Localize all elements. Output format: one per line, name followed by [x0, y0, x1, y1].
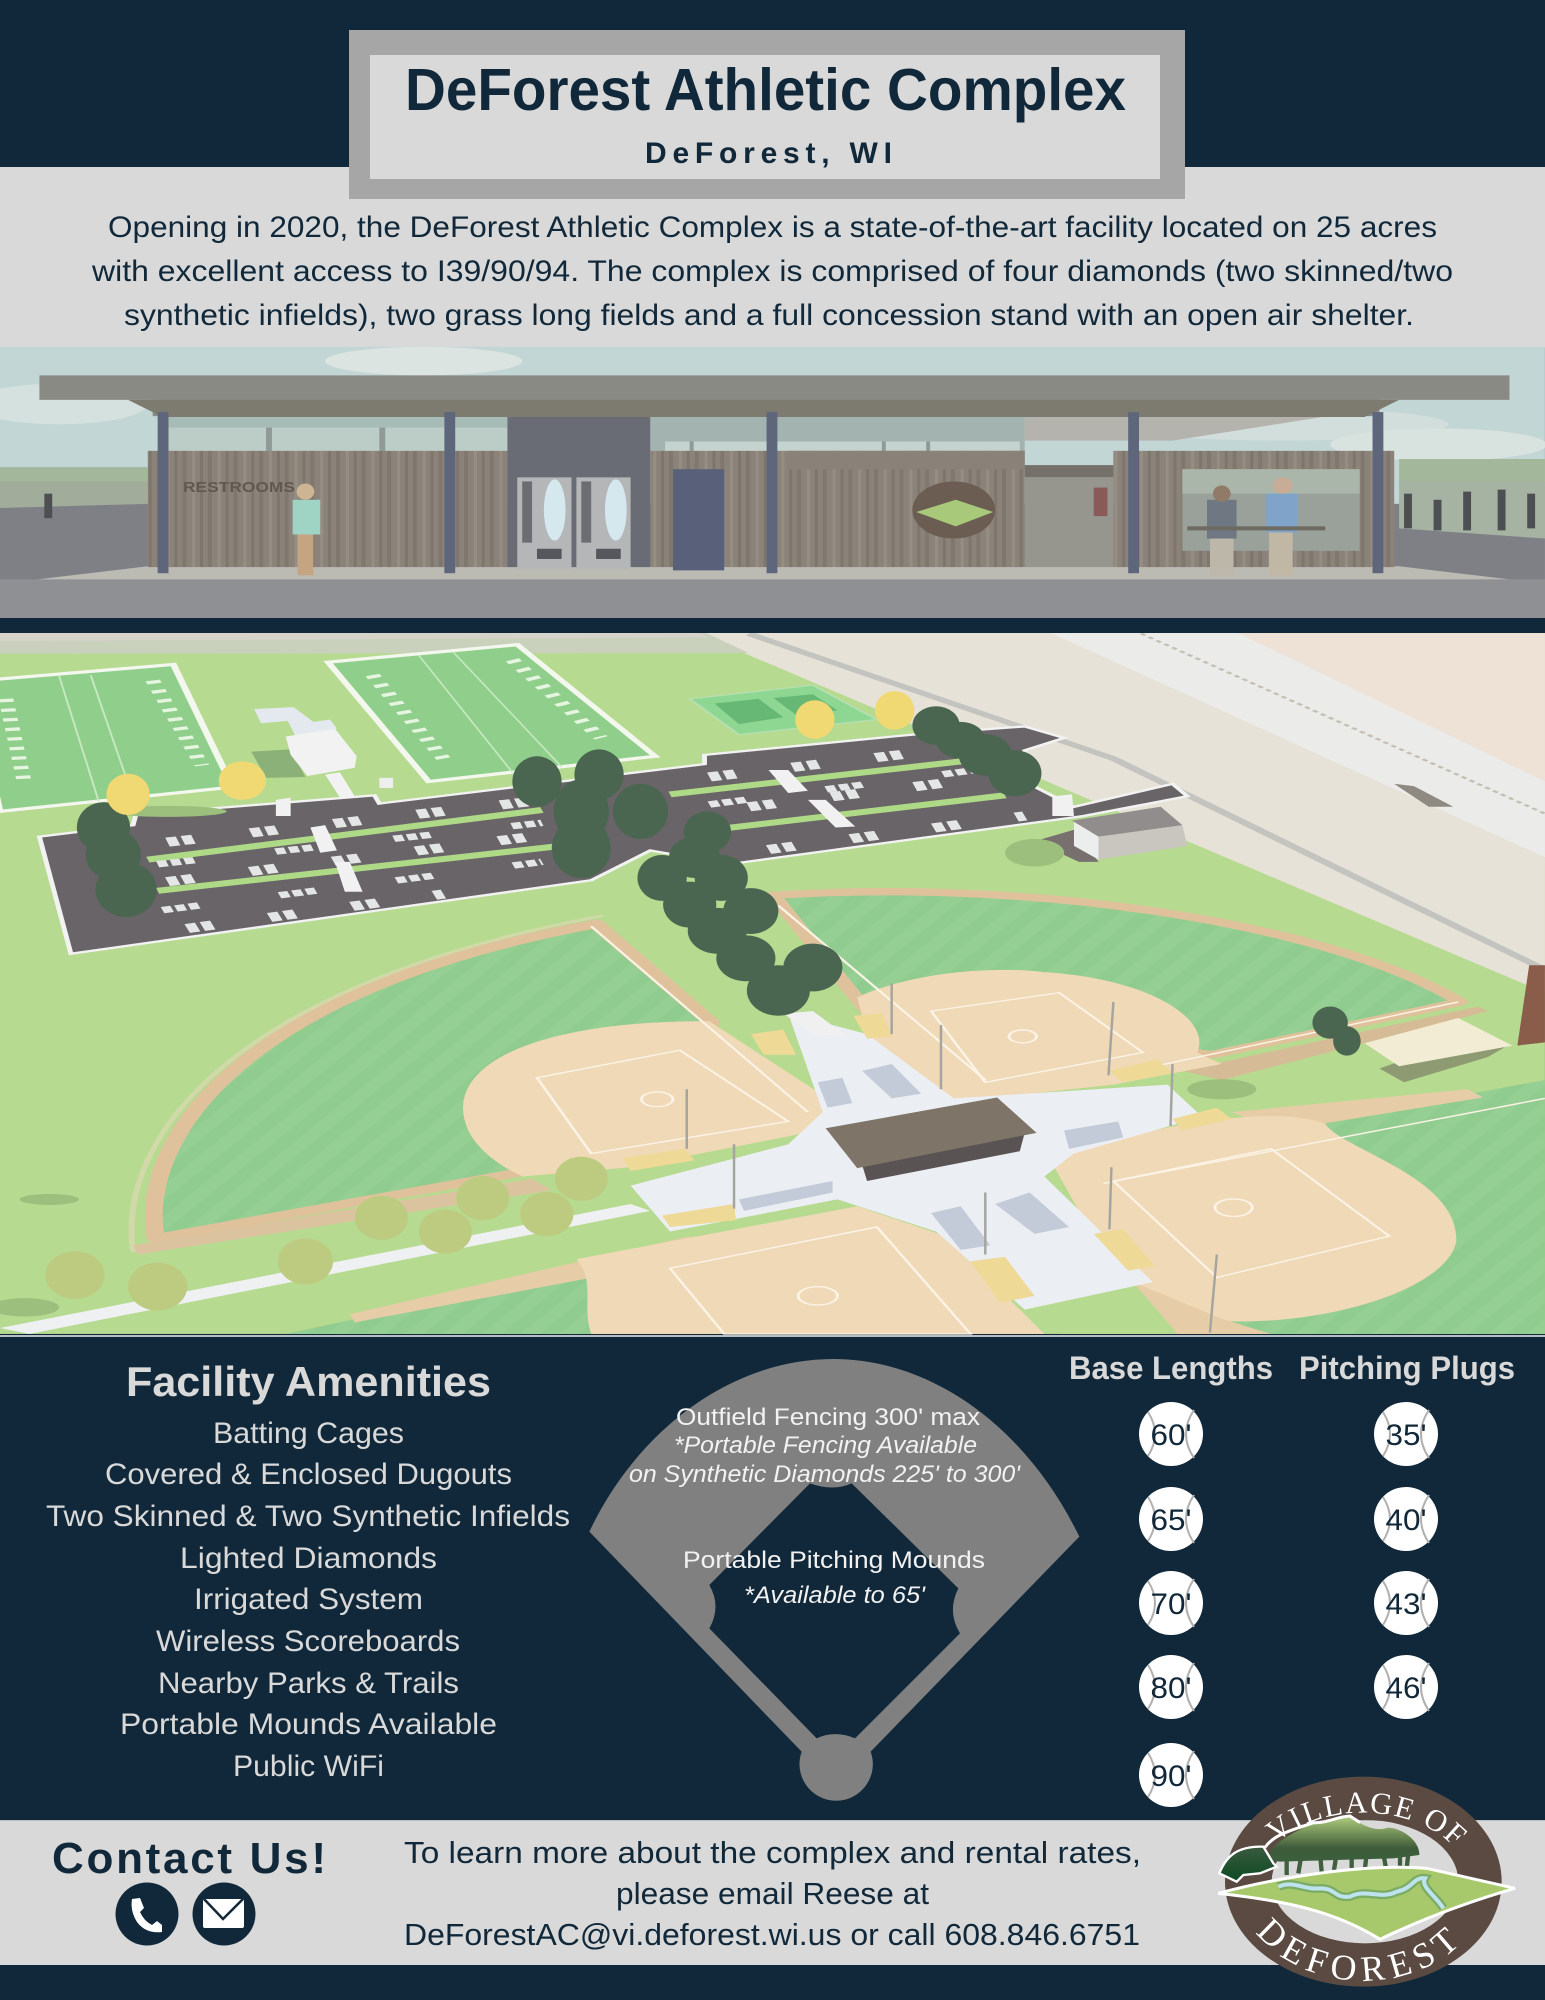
roof: [39, 375, 1509, 416]
logo tree line: [1219, 1816, 1419, 1882]
tree shadows: [0, 806, 1256, 1317]
pitching mounds note: Portable Pitching Mounds: [683, 1547, 985, 1574]
logo river: [1278, 1878, 1443, 1908]
frontage road: [749, 634, 1545, 970]
heading: facility amenities: Facility Amenities: [126, 1358, 491, 1405]
left diamond outfield: [154, 924, 711, 1238]
intro paragraph: Opening in 2020, the DeForest Athletic Complex is a state-of-the-art facility located on 25 acres: [108, 211, 1437, 244]
ground: [0, 504, 1545, 618]
icon: email: [192, 1882, 256, 1946]
central concession stand: [826, 1097, 1037, 1181]
outfield fencing note: [629, 1404, 1021, 1488]
warning paths: [350, 1236, 690, 1322]
olive trees: [45, 1157, 608, 1311]
intro paragraph: [91, 211, 1453, 332]
amenities list: Public WiFi: [233, 1750, 384, 1783]
upper glazing: [163, 416, 1025, 453]
people: [44, 477, 1535, 575]
outfield fencing note: on Synthetic Diamonds 225' to 300': [629, 1461, 1021, 1488]
pitching plug baseballs: 35': [1386, 1419, 1426, 1452]
title: DeForest Athletic Complex: [405, 57, 1126, 123]
bleachers: [739, 1064, 1123, 1250]
heading: pitching plugs: Pitching Plugs: [1299, 1350, 1515, 1386]
platform: [37, 566, 1509, 579]
light poles: [687, 984, 1217, 1333]
contact band: [0, 1821, 1545, 1965]
walls: [148, 451, 507, 567]
title box: [349, 30, 1185, 199]
outfield fencing note: Outfield Fencing 300' max: [676, 1404, 980, 1431]
contact text: To learn more about the complex and rental rates,: [404, 1835, 1141, 1870]
amenities list: [46, 1417, 570, 1783]
contact text: [404, 1835, 1141, 1952]
amenities list: Batting Cages: [213, 1417, 404, 1450]
intro paragraph: with excellent access to I39/90/94. The complex is comprised of four diamonds (two skinned/two: [91, 255, 1453, 288]
lower grass strip and dirt: [1025, 1282, 1177, 1334]
amenities list: Wireless Scoreboards: [156, 1625, 460, 1658]
base length baseballs: 70': [1150, 1588, 1192, 1621]
base length baseballs: 65': [1150, 1504, 1192, 1537]
logo: Village of DeForest: [1218, 1776, 1516, 1987]
parking islands: [276, 770, 1074, 892]
barn: [1035, 807, 1187, 862]
image: aerial site rendering: [0, 630, 1545, 1334]
football field 1: [0, 664, 233, 811]
image: concession building elevation: [0, 347, 1545, 618]
pitching plug baseballs: 40': [1386, 1504, 1426, 1537]
intro band: [0, 167, 1545, 348]
amenities list: Lighted Diamonds: [180, 1542, 437, 1575]
icon: phone: [116, 1882, 178, 1946]
parked cars: [168, 752, 1025, 928]
amenities list: Portable Mounds Available: [120, 1708, 497, 1741]
central plaza: [631, 1013, 1202, 1310]
outfield fencing note: *Portable Fencing Available: [674, 1432, 977, 1459]
building logo: [912, 481, 995, 539]
highway: [1044, 630, 1545, 857]
right diamond outfield: [773, 892, 1460, 1055]
base lines: [537, 906, 1545, 1334]
land beyond site: [690, 630, 1545, 993]
amenities list: Covered & Enclosed Dugouts: [105, 1458, 512, 1491]
yellow trees: [106, 691, 914, 815]
pitching plug baseballs: 43': [1386, 1588, 1426, 1621]
logo text top: VILLAGE OF: [1264, 1792, 1468, 1842]
tennis courts: [690, 685, 877, 735]
pitching mounds note: *Available to 65': [744, 1582, 926, 1609]
pavilion: [1365, 1018, 1512, 1082]
conifer trees: [77, 706, 1361, 1056]
amenities list: Nearby Parks & Trails: [158, 1667, 459, 1700]
navy separator above aerial: [0, 618, 1545, 633]
contact heading: Contact Us!: [52, 1834, 326, 1883]
baseball diamond graphic: [589, 1359, 1079, 1801]
base length baseballs: [1139, 1402, 1203, 1807]
subtitle: DeForest, WI: [645, 137, 892, 170]
base length baseballs: 90': [1150, 1760, 1192, 1793]
parking lot: [39, 726, 1187, 954]
base length baseballs: 80': [1150, 1672, 1192, 1705]
left diamond fence line: [132, 916, 603, 1252]
horizon trees: [0, 459, 1545, 483]
pitching plug baseballs: [1374, 1402, 1438, 1719]
dugouts: [623, 1013, 1232, 1303]
base length baseballs: 60': [1150, 1419, 1192, 1452]
intro paragraph: synthetic infields), two grass long fields and a full concession stand with an open air shelter.: [124, 299, 1414, 332]
lower right outfield: [1222, 1080, 1545, 1334]
logo green diamond: [1218, 1867, 1515, 1939]
amenities list: Irrigated System: [194, 1583, 423, 1616]
contact text: please email Reese at: [616, 1876, 929, 1911]
path along trees: [0, 1204, 650, 1334]
heading: base lengths: Base Lengths: [1069, 1350, 1273, 1386]
infield skins: [463, 970, 1456, 1334]
restroom sign: RESTROOMS: [183, 479, 295, 496]
pitching plug baseballs: 46': [1386, 1672, 1426, 1705]
vending machines: [517, 477, 631, 569]
amenities list: Two Skinned & Two Synthetic Infields: [46, 1500, 570, 1533]
columns: [158, 412, 1383, 573]
lower left outfield: [286, 1268, 591, 1334]
contact text: DeForestAC@vi.deforest.wi.us or call 608.846.6751: [404, 1917, 1140, 1952]
scoreboard: [1517, 965, 1545, 1046]
pitching mounds note: [683, 1547, 985, 1609]
grass medians: [148, 761, 1005, 891]
restroom building: [251, 707, 393, 798]
logo text bottom: DEFOREST: [1256, 1916, 1456, 1982]
football field 2: [328, 645, 655, 782]
image dividers: [0, 1335, 1545, 1822]
